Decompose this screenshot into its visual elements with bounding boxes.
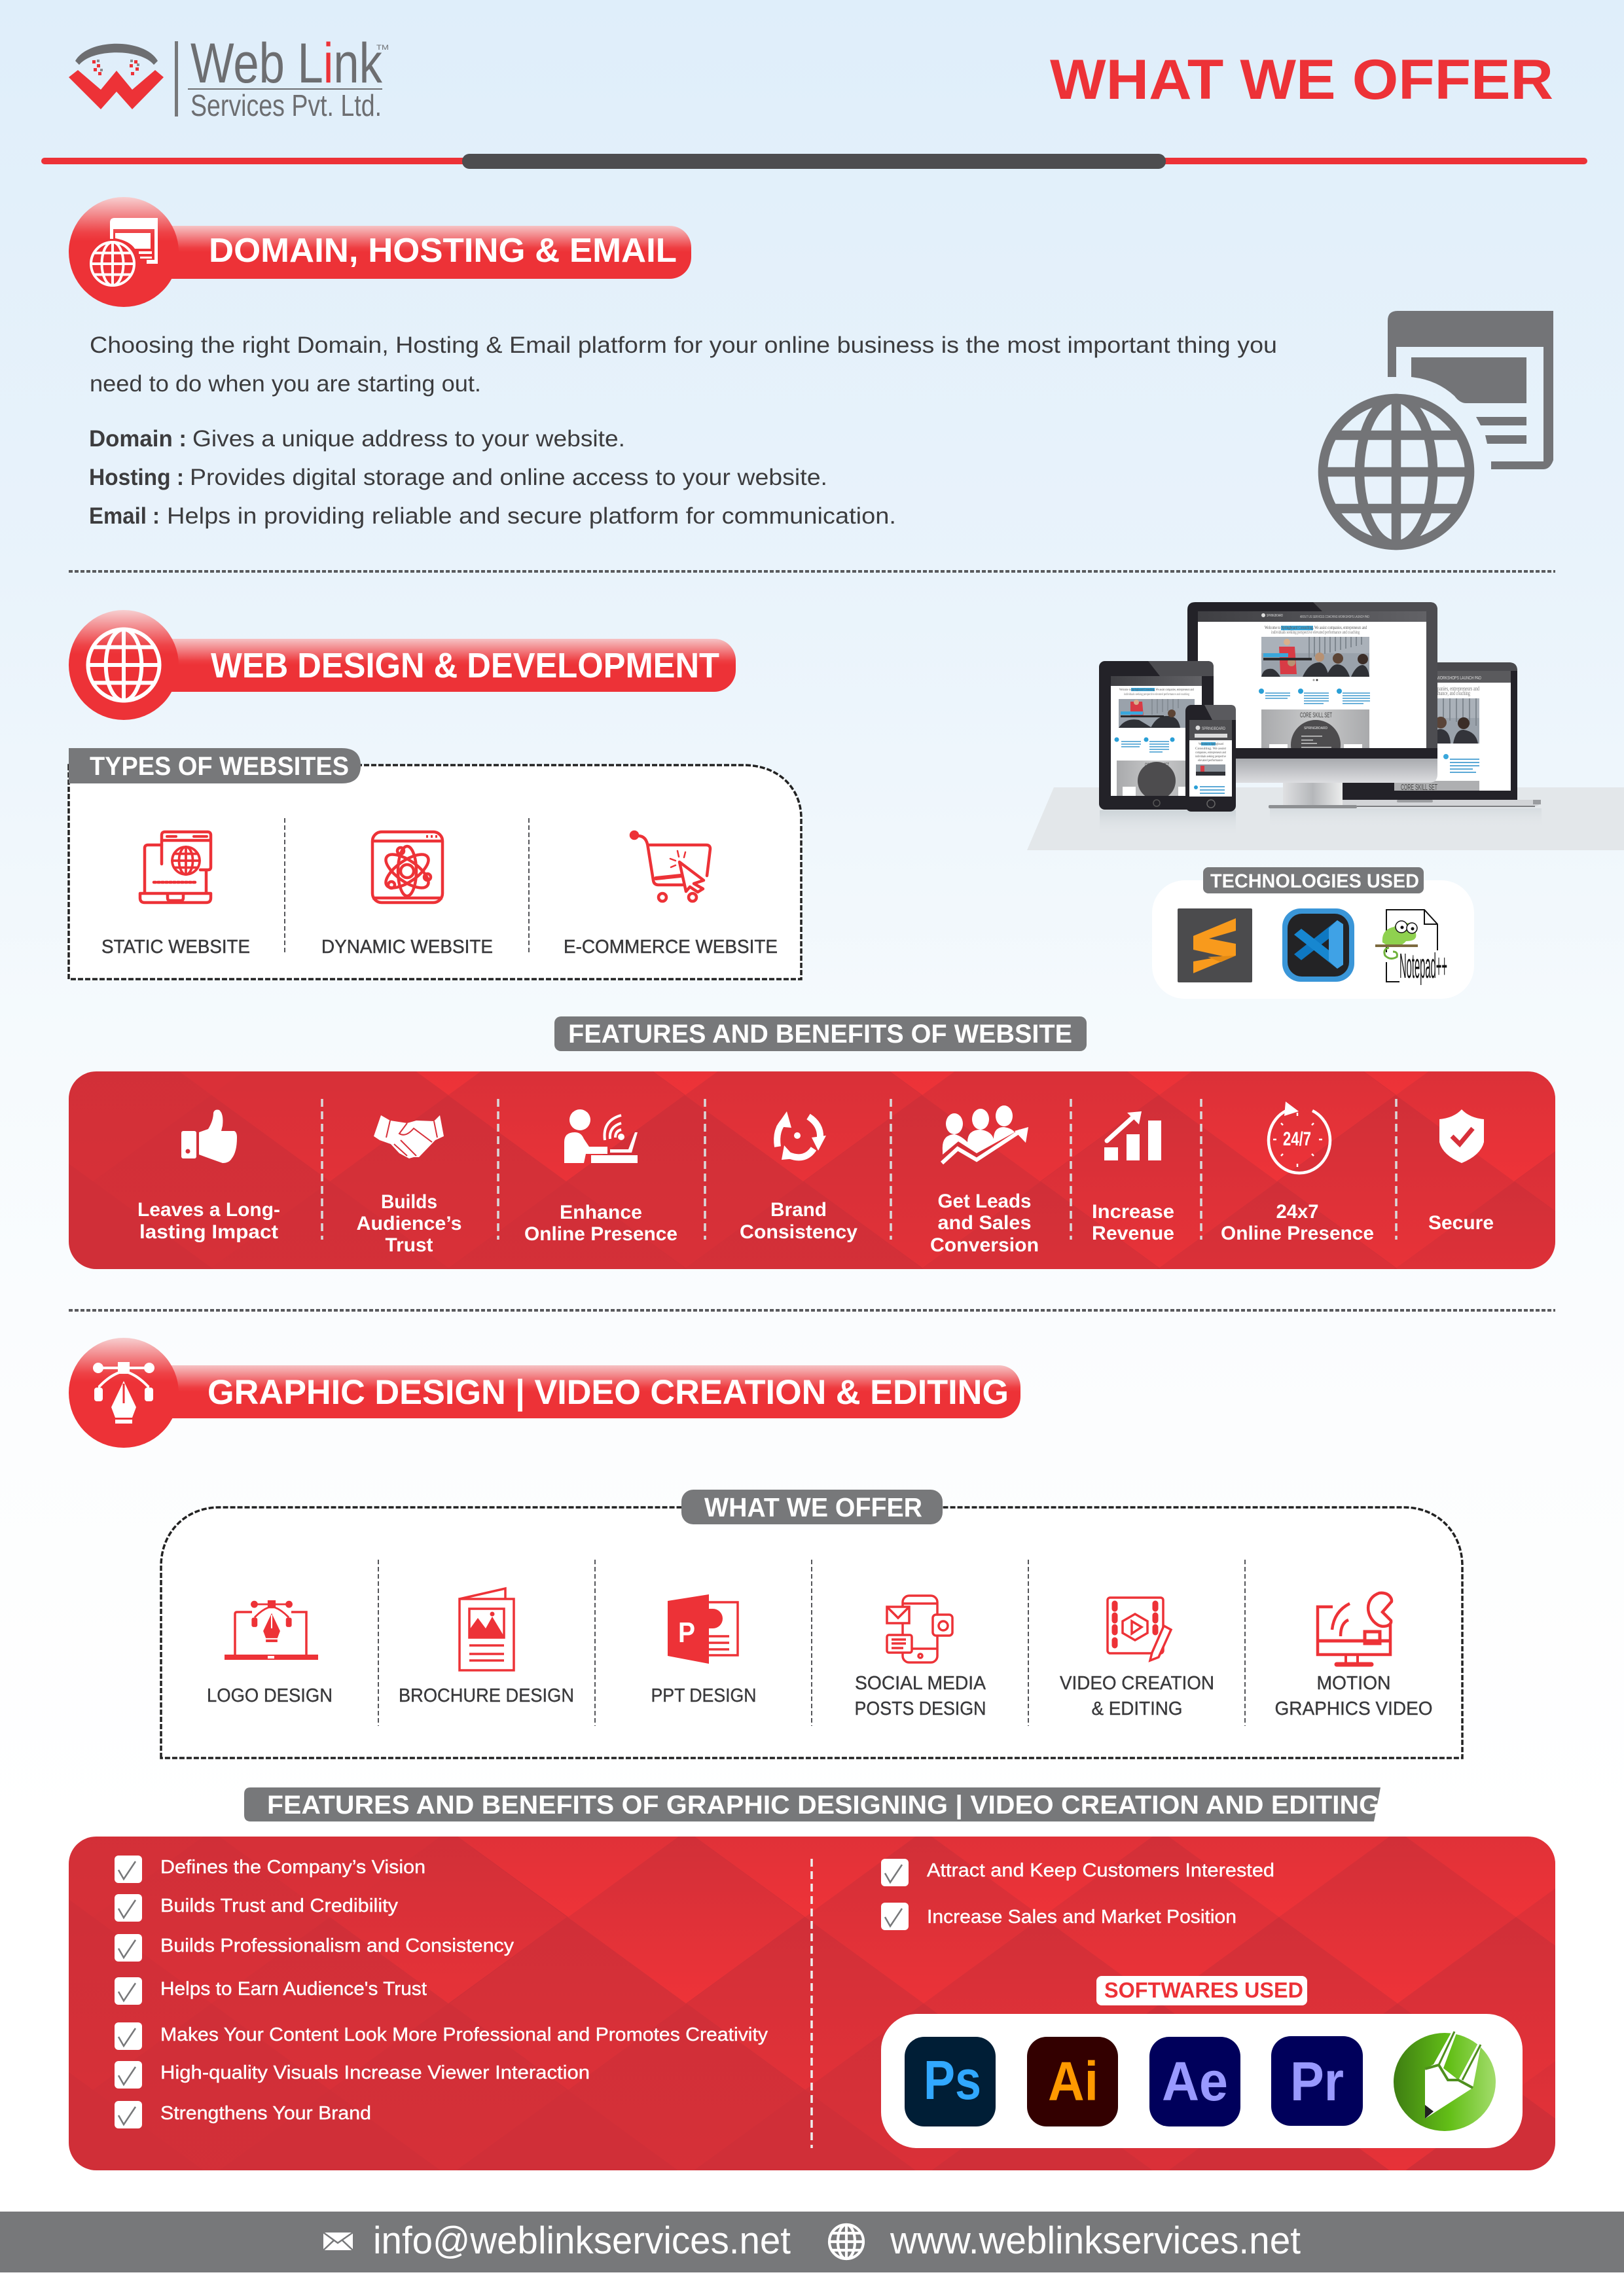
text block: domain hosting email description: Helps in providing reliable and secure platform for communication.: [167, 503, 896, 529]
checklist: right column: Attract and Keep Customers Interested: [927, 1860, 1274, 1881]
desktop monitor: CORE SKILL SET: [1300, 711, 1332, 719]
title: WHAT WE OFFER: [1050, 48, 1553, 111]
label: brochure design: BROCHURE DESIGN: [399, 1685, 574, 1706]
icon: notepad++: [1375, 910, 1447, 986]
icon: globe: [88, 630, 160, 700]
feature labels: Builds: [381, 1191, 437, 1213]
phone: elevated performance: [1198, 759, 1223, 762]
icon: visual studio code: [1282, 908, 1354, 982]
label: social media posts design: POSTS DESIGN: [855, 1698, 986, 1719]
devices mockup: [1027, 602, 1624, 850]
checklist: left column: Makes Your Content Look More Professional and Promotes Creativity: [160, 2024, 768, 2045]
icon: globe: [829, 2225, 863, 2259]
tablet: Welcome to Springboard Consulting. We assist companies, entrepreneurs and: [1119, 688, 1194, 692]
desktop monitor: ABOUT US SERVICES COACHING WORKSHOPS LAUNCH PAD: [1300, 615, 1369, 619]
tablet: individuals seeking perspective elevated performance and coaching: [1124, 692, 1189, 696]
icon: large web page and globe: [1323, 311, 1553, 545]
desktop monitor: SPRINGBOARD: [1267, 614, 1283, 618]
label: softwares used: SOFTWARES USED: [1104, 1978, 1303, 2002]
laptop: mance, and coaching: [1437, 690, 1470, 696]
phone: individuals seeking perspective: [1195, 755, 1227, 759]
panel: graphic design features and software: [69, 1837, 1555, 2170]
logo: Web Link Services: Services Pvt. Ltd.: [190, 88, 382, 122]
feature labels: Revenue: [1092, 1223, 1174, 1244]
feature labels: Conversion: [930, 1234, 1039, 1256]
icon: 24/7 clock: [1269, 1102, 1330, 1173]
icon: motion graphics video: [1318, 1593, 1392, 1664]
feature labels: Secure: [1428, 1212, 1494, 1234]
logo: Web Link Services: [69, 32, 389, 122]
label: video creation and editing: VIDEO CREATION: [1060, 1673, 1214, 1694]
section heading: graphic design, video creation and editing: [69, 1338, 1020, 1448]
label: technologies used: TECHNOLOGIES USED: [1210, 870, 1419, 892]
contact: website: www.weblinkservices.net: [890, 2219, 1301, 2262]
icon: social media: [887, 1596, 952, 1662]
laptop: [1341, 662, 1541, 807]
section heading: domain, hosting and email: [69, 197, 691, 307]
laptop: panies, entrepreneurs and: [1437, 685, 1479, 692]
icon: thumbs up: [181, 1110, 237, 1163]
label: dynamic website: DYNAMIC WEBSITE: [321, 937, 493, 958]
label: social media posts design: SOCIAL MEDIA: [855, 1673, 986, 1694]
phone: Consulting. We assist: [1195, 747, 1227, 751]
label: video creation and editing: & EDITING: [1092, 1698, 1182, 1719]
label: video creation and editing: [1060, 1673, 1214, 1719]
icon: shopping cart with cursor: [631, 832, 710, 901]
icon: pen tool: [93, 1362, 154, 1424]
icon: 24/7 clock: 24/7: [1283, 1128, 1311, 1150]
icon: photoshop: Ps: [924, 2049, 981, 2111]
text: Notepad++: [1399, 946, 1447, 986]
feature labels: 24x7: [1276, 1201, 1318, 1223]
feature labels: Increase: [1092, 1201, 1174, 1223]
icon: coreldraw: [1394, 2032, 1496, 2131]
text block: domain hosting email description: Domain :: [89, 426, 187, 452]
desktop monitor: Welcome to Springboard Consulting. We assist companies, entrepreneurs and: [1265, 625, 1367, 630]
icon: web page and globe: [91, 218, 158, 285]
icon: security shield: [1439, 1109, 1484, 1163]
phone: Welcome to Springboard: [1199, 743, 1223, 746]
icon: video creation and editing: [1108, 1598, 1171, 1660]
checklist: left column: High-quality Visuals Increase Viewer Interaction: [160, 2062, 590, 2083]
icon: envelope: [323, 2233, 353, 2250]
label: what we offer: WHAT WE OFFER: [704, 1492, 922, 1522]
icon: powerpoint: [668, 1594, 738, 1664]
panel: technologies used: [1152, 867, 1474, 999]
icon: brochure design: [460, 1588, 514, 1670]
feature labels: Online Presence: [524, 1223, 677, 1245]
logo: Web Link Services: Web Link: [190, 32, 383, 95]
phone: [1185, 705, 1236, 812]
floor: [1027, 787, 1624, 850]
checklist: left column: Defines the Company’s Vision: [160, 1857, 425, 1878]
label: motion graphics video: GRAPHICS VIDEO: [1275, 1698, 1432, 1719]
feature labels: Enhance: [560, 1202, 642, 1223]
panel: what we offer: [161, 1490, 1462, 1758]
icon: premiere pro: Pr: [1290, 2051, 1344, 2112]
feature labels: Get Leads: [937, 1191, 1032, 1212]
feature labels: Online Presence: [1221, 1223, 1374, 1244]
header rule: [41, 154, 1587, 169]
feature labels: Leaves a Long-: [137, 1199, 280, 1221]
label: features and benefits of graphic designing: FEATURES AND BENEFITS OF GRAPHIC DESIGNING | VIDEO CREATION AND EDITING: [267, 1791, 1380, 1820]
label: logo design: LOGO DESIGN: [207, 1685, 333, 1706]
feature labels: and Sales: [937, 1212, 1032, 1234]
text block: domain hosting email description: Email :: [89, 503, 160, 529]
panel: software icons: [881, 2014, 1523, 2148]
icon: leads and sales arrow: [942, 1105, 1028, 1163]
icon: logo design: [225, 1600, 318, 1660]
section heading: domain, hosting and email: DOMAIN, HOSTING & EMAIL: [209, 232, 677, 270]
label: ppt design: PPT DESIGN: [651, 1685, 757, 1706]
label: e-commerce website: E-COMMERCE WEBSITE: [564, 937, 778, 958]
icon: after effects: Ae: [1162, 2051, 1228, 2112]
text block: domain hosting email description: Gives a unique address to your website.: [192, 426, 625, 452]
checklist: left column: Builds Trust and Credibility: [160, 1895, 399, 1916]
laptop: WORKSHOPS LAUNCH PAD: [1437, 676, 1481, 681]
icon: dynamic website: [372, 832, 442, 903]
phone: SPRINGBOARD: [1202, 727, 1226, 731]
icon: premiere pro: [1271, 2036, 1363, 2126]
checklist: left column: [115, 1856, 768, 2128]
phone: companies, entrepreneurs and: [1195, 751, 1226, 755]
feature labels: [137, 1191, 1494, 1256]
label: static website: STATIC WEBSITE: [101, 937, 250, 958]
desktop monitor: SPRINGBOARD: [1304, 726, 1327, 730]
text block: domain hosting email description: [89, 332, 1277, 529]
panel: website features and benefits: [69, 1071, 1555, 1269]
checklist: right column: Increase Sales and Market Position: [927, 1907, 1236, 1928]
tablet: [1099, 661, 1214, 810]
icon: illustrator: Ai: [1048, 2051, 1098, 2112]
feature labels: lasting Impact: [139, 1221, 278, 1243]
feature labels: Audience’s: [356, 1213, 462, 1234]
icon: increase revenue chart: [1104, 1111, 1161, 1160]
section heading: graphic design, video creation and editing: GRAPHIC DESIGN | VIDEO CREATION & EDITING: [208, 1373, 1009, 1412]
icon: handshake: [374, 1115, 444, 1158]
desktop monitor: [1187, 602, 1437, 808]
label: social media posts design: [855, 1673, 986, 1719]
contact: email: info@weblinkservices.net: [373, 2219, 791, 2262]
checklist: right column: [881, 1859, 1274, 1930]
text block: domain hosting email description: Provides digital storage and online access to your website.: [190, 465, 827, 490]
icon: brand consistency cycle: [776, 1111, 826, 1160]
icon: person with wifi laptop: [564, 1109, 638, 1163]
icon: sublime text: [1178, 908, 1252, 982]
section heading: web design and development: WEB DESIGN & DEVELOPMENT: [211, 646, 719, 685]
feature labels: Brand: [770, 1199, 827, 1221]
text block: domain hosting email description: Hosting :: [89, 465, 184, 490]
icon: illustrator: [1027, 2037, 1118, 2126]
feature labels: Trust: [385, 1234, 433, 1256]
checklist: left column: Strengthens Your Brand: [160, 2103, 371, 2124]
tablet: CORE SKILL SET: [1145, 762, 1169, 768]
label: features and benefits of website: FEATURES AND BENEFITS OF WEBSITE: [568, 1020, 1072, 1049]
desktop monitor: individuals seeking perspective elevated performance and coaching: [1271, 630, 1360, 635]
feature labels: Consistency: [740, 1221, 857, 1243]
label: types of websites: TYPES OF WEBSITES: [90, 752, 349, 781]
panel: types of websites: [69, 748, 801, 979]
icon: after effects: [1149, 2037, 1240, 2126]
label: motion graphics video: [1275, 1673, 1432, 1719]
text block: domain hosting email description: Choosing the right Domain, Hosting & Email platform for your online business is the most important thing you: [90, 332, 1277, 358]
checklist: left column: Helps to Earn Audience's Trust: [160, 1979, 427, 2000]
icon: static website: [140, 832, 211, 903]
label: motion graphics video: MOTION: [1317, 1673, 1390, 1694]
icon: powerpoint: P: [678, 1617, 695, 1649]
checklist: left column: Builds Professionalism and Consistency: [160, 1935, 514, 1956]
footer bar: [0, 2212, 1624, 2272]
logo: Web Link Services: TM: [376, 44, 389, 52]
icon: photoshop: [905, 2037, 996, 2126]
section heading: web design and development: [69, 610, 736, 720]
laptop: CORE SKILL SET: [1401, 782, 1437, 792]
text block: domain hosting email description: need to do when you are starting out.: [90, 371, 481, 397]
